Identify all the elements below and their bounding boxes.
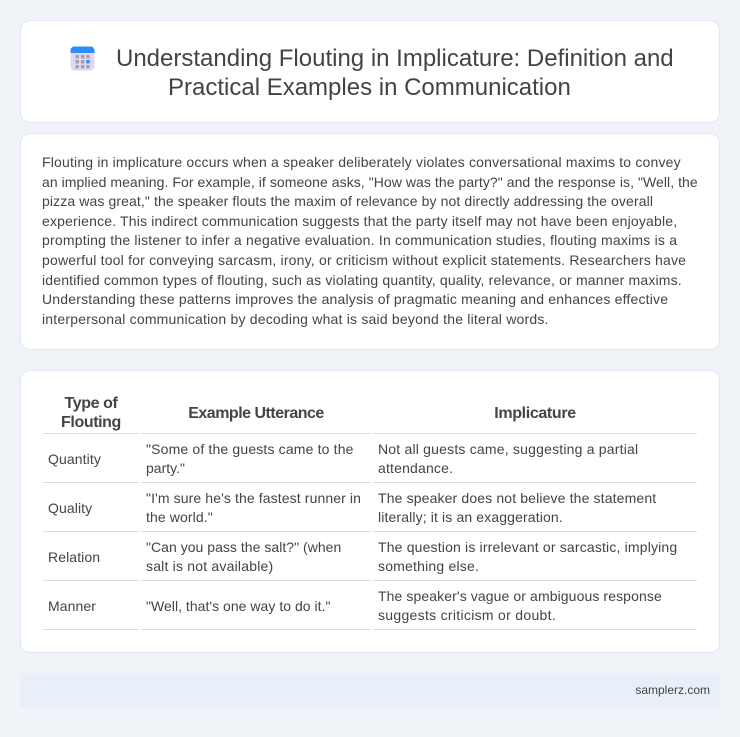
table header <box>61 395 576 431</box>
title <box>116 45 674 101</box>
title: Understanding Flouting in Implicature: Definition and <box>116 45 674 72</box>
text block: paragraph: pizza was great," the speaker flouts the maxim of relevance by not directly addressing the overall <box>42 193 653 209</box>
row: Relation: "Can you pass the salt?" (when <box>146 539 341 555</box>
row: Quantity: party." <box>146 460 185 476</box>
row: Manner: Manner <box>48 598 96 614</box>
row: Quality: the world." <box>146 509 213 525</box>
row: Quantity <box>48 441 638 476</box>
table header: Example Utterance <box>188 405 324 422</box>
row: Manner: "Well, that's one way to do it." <box>146 598 331 614</box>
row: Relation: salt is not available) <box>146 558 273 574</box>
text block: paragraph: Flouting in implicature occurs when a speaker deliberately violates conversational maxims to convey <box>42 154 681 170</box>
row: Quantity: "Some of the guests came to the <box>146 441 354 457</box>
table header: Type of <box>65 395 117 412</box>
table header: Implicature <box>494 405 576 422</box>
row: Quantity: Not all guests came, suggesting a partial <box>378 441 638 457</box>
row: Quality: literally; it is an exaggeration. <box>378 509 563 525</box>
row: Manner: suggests criticism or doubt. <box>378 607 556 623</box>
text block: paragraph: interpersonal communication by decoding what is said beyond the literal words. <box>42 311 549 327</box>
text block: paragraph: powerful tool for conveying sarcasm, irony, or criticism without explicit statements. Researchers have <box>42 252 686 268</box>
table header: Flouting <box>61 414 121 431</box>
row: Quality: The speaker does not believe the statement <box>378 490 656 506</box>
row: Manner: The speaker's vague or ambiguous response <box>378 588 662 604</box>
row: Quantity: attendance. <box>378 460 453 476</box>
row: Quantity: Quantity <box>48 451 101 467</box>
footer bar <box>20 673 720 707</box>
text block: paragraph: experience. This indirect communication suggests that the party itself may not have been enjoyable, <box>42 213 677 229</box>
footer text: samplerz.com <box>635 683 710 697</box>
row: Quality <box>48 490 656 525</box>
row: Quality: "I'm sure he's the fastest runner in <box>146 490 361 506</box>
row: Manner <box>48 588 662 623</box>
row: Relation: The question is irrelevant or sarcastic, implying <box>378 539 677 555</box>
text block: paragraph: prompting the listener to infer a negative evaluation. In communication studies, flouting maxims is a <box>42 232 677 248</box>
title: Practical Examples in Communication <box>168 74 571 101</box>
row: Quality: Quality <box>48 500 92 516</box>
header card <box>20 20 720 123</box>
text block: paragraph: an implied meaning. For example, if someone asks, "How was the party?" and the response is, "Well, the <box>42 174 698 190</box>
panel: flouting table <box>20 370 720 653</box>
text block: paragraph <box>42 154 698 327</box>
row: Relation <box>48 539 677 574</box>
icon: calendar <box>70 46 94 70</box>
row: Relation: Relation <box>48 549 100 565</box>
text block: paragraph: Understanding these patterns improves the analysis of pragmatic meaning and enhances effective <box>42 291 668 307</box>
row: Relation: something else. <box>378 558 479 574</box>
text block: paragraph: identified common types of flouting, such as violating quantity, quality, relevance, or manner maxims. <box>42 272 682 288</box>
panel: intro paragraph <box>20 133 720 350</box>
